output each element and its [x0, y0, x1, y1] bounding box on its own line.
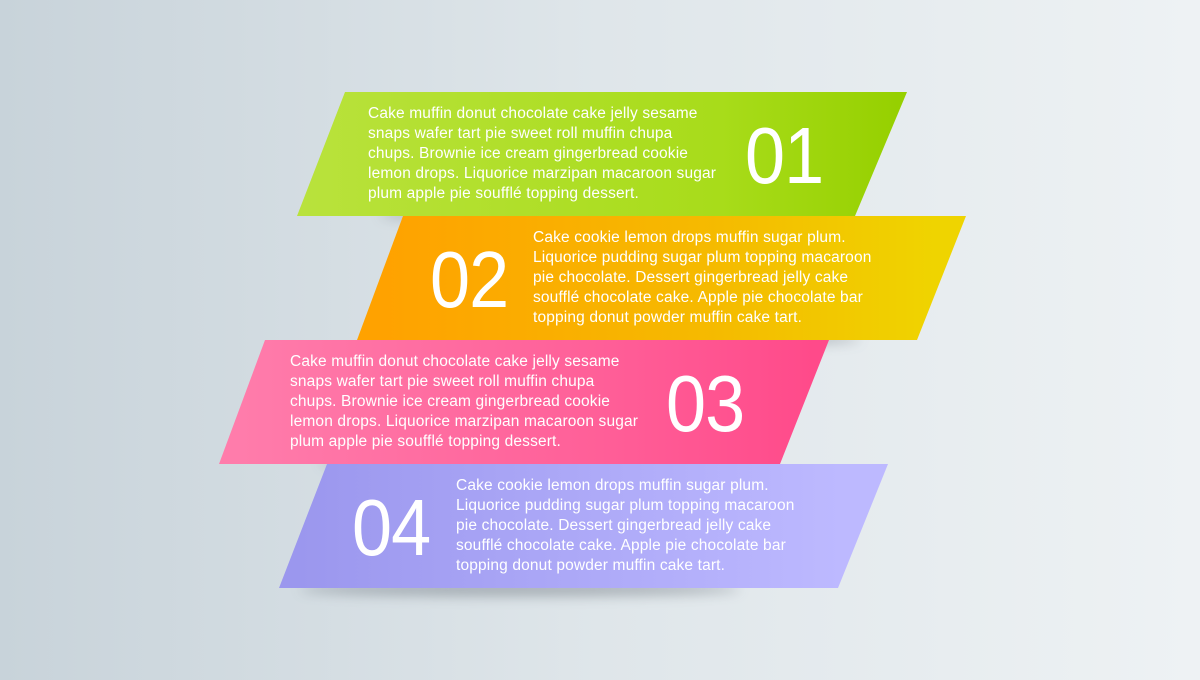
text block 01: chups. Brownie ice cream gingerbread cookie	[368, 145, 688, 162]
text block 01	[368, 105, 716, 202]
text block 03: plum apple pie soufflé topping dessert.	[290, 433, 561, 450]
text block 01: snaps wafer tart pie sweet roll muffin chupa	[368, 125, 672, 142]
text block 04: pie chocolate. Dessert gingerbread jelly cake	[456, 517, 771, 534]
text block 02: topping donut powder muffin cake tart.	[533, 309, 802, 326]
text block 02	[533, 229, 872, 326]
panel: band 01	[297, 92, 907, 216]
text block 03: lemon drops. Liquorice marzipan macaroon sugar	[290, 413, 638, 430]
text block 02: soufflé chocolate cake. Apple pie chocolate bar	[533, 289, 863, 306]
text block 02: Cake cookie lemon drops muffin sugar plum.	[533, 229, 846, 246]
panel: band 02	[357, 216, 966, 340]
number 02: 02	[430, 235, 508, 324]
text block 04: topping donut powder muffin cake tart.	[456, 557, 725, 574]
text block 02: pie chocolate. Dessert gingerbread jelly cake	[533, 269, 848, 286]
text block 04: soufflé chocolate cake. Apple pie chocolate bar	[456, 537, 786, 554]
text block 03: chups. Brownie ice cream gingerbread cookie	[290, 393, 610, 410]
text block 04: Liquorice pudding sugar plum topping macaroon	[456, 497, 794, 514]
text block 03	[290, 353, 638, 450]
text block 04	[456, 477, 794, 574]
panel: band 03	[219, 340, 829, 464]
number 01: 01	[745, 111, 823, 200]
text block 01: lemon drops. Liquorice marzipan macaroon sugar	[368, 165, 716, 182]
text block 03: snaps wafer tart pie sweet roll muffin chupa	[290, 373, 594, 390]
panel: band 04	[279, 464, 888, 588]
text block 01: Cake muffin donut chocolate cake jelly sesame	[368, 105, 698, 122]
text block 02: Liquorice pudding sugar plum topping macaroon	[533, 249, 872, 266]
text block 01: plum apple pie soufflé topping dessert.	[368, 185, 639, 202]
text block 04: Cake cookie lemon drops muffin sugar plum.	[456, 477, 769, 494]
number 03: 03	[666, 359, 744, 448]
number 04: 04	[352, 483, 430, 572]
text block 03: Cake muffin donut chocolate cake jelly sesame	[290, 353, 620, 370]
